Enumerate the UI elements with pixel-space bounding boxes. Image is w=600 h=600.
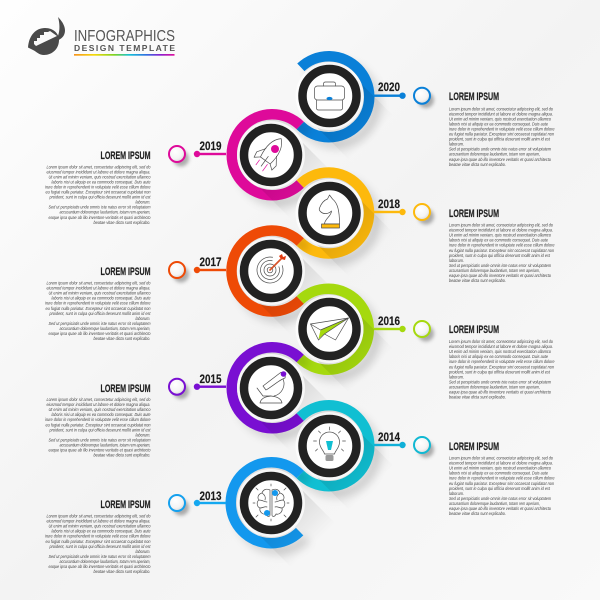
year 2020: 2020 (378, 82, 400, 94)
body 2015: accusantium doloremque laudantium, totam rem aperiam, (60, 442, 150, 448)
body 2020: beatae vitae dicta sunt explicabo. (449, 162, 506, 168)
body 2014: irure dolor in reprehenderit in voluptate velit esse cillum dolore (449, 476, 555, 482)
icon: microscope (257, 371, 286, 403)
body 2013: proident, sunt in culpa qui officia deserunt mollit anim id est (49, 544, 151, 550)
connector 2017 (194, 267, 226, 273)
node 2015 (169, 379, 189, 399)
stage 2020 (296, 56, 434, 168)
text block: 2018 (448, 208, 555, 284)
body 2016: laborum. (449, 374, 464, 380)
body 2013: laborum. (136, 549, 150, 555)
body 2019 (45, 164, 151, 226)
icon: briefcase (314, 82, 344, 110)
node 2017 (169, 262, 189, 282)
body 2017: laborum. (136, 316, 150, 322)
node 2020 (414, 88, 434, 108)
body 2014: accusantium doloremque laudantium, totam rem aperiam, (449, 501, 540, 507)
body 2019: laborum. (136, 200, 150, 206)
connector 2020 (374, 92, 406, 99)
heading 2013: LOREM IPSUM (100, 499, 150, 511)
heading 2017: LOREM IPSUM (100, 266, 150, 278)
body 2019: accusantium doloremque laudantium, totam rem aperiam, (60, 210, 150, 216)
icon: rocket (250, 132, 291, 176)
body 2020: Lorem ipsum dolor sit amet, consectetur adipiscing elit, sed do (449, 106, 553, 112)
body 2016: proident, sunt in culpa qui officia deserunt mollit anim id est (448, 369, 551, 375)
body 2017: eiusmod tempor incididunt ut labore et dolore magna aliqua. (46, 286, 150, 292)
arc 2017 (231, 230, 300, 311)
body 2018: eiusmod tempor incididunt ut labore et dolore magna aliqua. (449, 228, 553, 234)
body 2014: Ut enim ad minim veniam, quis nostrud exercitation ullamco (449, 466, 551, 472)
body 2014: laborum. (449, 491, 464, 497)
body 2019: Lorem ipsum dolor sit amet, consectetur adipiscing elit, sed do (46, 164, 151, 170)
body 2019: beatae vitae dicta sunt explicabo. (94, 220, 150, 226)
body 2014: eaque ipsa quae ab illo inventore veritatis et quasi architecto (449, 506, 551, 512)
connector 2013 (194, 500, 226, 506)
body 2019: eaque ipsa quae ab illo inventore veritatis et quasi architecto (48, 215, 151, 221)
body 2018: beatae vitae dicta sunt explicabo. (449, 278, 506, 284)
year 2018: 2018 (378, 199, 401, 211)
body 2015: Ut enim ad minim veniam, quis nostrud exercitation ullamco (48, 407, 151, 413)
node 2016 (414, 321, 434, 342)
icon: chess knight (319, 195, 340, 228)
body 2016: eiusmod tempor incididunt ut labore et dolore magna aliqua. (449, 344, 553, 350)
heading 2019: LOREM IPSUM (100, 150, 150, 162)
body 2018: proident, sunt in culpa qui officia deserunt mollit anim id est (448, 253, 551, 259)
stage 2015 (169, 347, 343, 460)
body 2020: laborum. (449, 142, 464, 148)
body 2013: eiusmod tempor incididunt ut labore et dolore magna aliqua. (46, 519, 150, 525)
body 2019: eiusmod tempor incididunt ut labore et dolore magna aliqua. (46, 169, 150, 175)
body 2018: laborum. (449, 258, 464, 264)
body 2013 (45, 514, 151, 575)
heading 2014: LOREM IPSUM (449, 441, 499, 453)
body 2014: proident, sunt in culpa qui officia deserunt mollit anim id est (448, 486, 551, 492)
body 2018: laboris nisi ut aliquip ex ea commodo consequat. Duis aute (449, 238, 548, 244)
body 2013: laboris nisi ut aliquip ex ea commodo consequat. Duis aute (52, 529, 151, 535)
medallion 2014 (302, 419, 356, 473)
body 2017: beatae vitae dicta sunt explicabo. (94, 336, 150, 342)
body 2016: irure dolor in reprehenderit in voluptate velit esse cillum dolore (449, 359, 555, 365)
body 2016: Ut enim ad minim veniam, quis nostrud exercitation ullamco (449, 349, 551, 355)
heading 2016: LOREM IPSUM (449, 324, 499, 336)
body 2019: proident, sunt in culpa qui officia deserunt mollit anim id est (49, 195, 151, 201)
medallion 2013 (244, 476, 298, 530)
body 2016 (448, 339, 555, 401)
body 2017 (45, 280, 151, 342)
body 2015: Lorem ipsum dolor sit amet, consectetur adipiscing elit, sed do (46, 397, 151, 403)
connector 2014 (374, 442, 406, 448)
body 2020 (448, 106, 555, 168)
body 2018: accusantium doloremque laudantium, totam rem aperiam, (449, 268, 540, 274)
medallion 2018 (302, 186, 356, 240)
body 2016: accusantium doloremque laudantium, totam rem aperiam, (449, 384, 540, 390)
logo (28, 17, 175, 56)
body 2015: laborum. (136, 432, 150, 438)
body 2020: Sed ut perspiciatis unde omnis iste natus error sit voluptatem (449, 147, 551, 153)
medallion 2017 (244, 244, 298, 298)
body 2016: Lorem ipsum dolor sit amet, consectetur adipiscing elit, sed do (449, 339, 553, 345)
arc 2016 (300, 289, 369, 370)
medallion 2016 (302, 302, 356, 356)
stage 2013 (169, 462, 343, 575)
logo mark (28, 17, 65, 55)
body 2015 (45, 397, 151, 459)
year 2013: 2013 (200, 491, 222, 503)
connector 2019 (194, 151, 226, 157)
text block: 2013 (45, 499, 151, 575)
year 2017: 2017 (200, 257, 222, 269)
body 2015: eiusmod tempor incididunt ut labore et dolore magna aliqua. (46, 402, 150, 408)
icon: paper plane (310, 318, 348, 340)
stage 2019 (169, 114, 343, 227)
body 2017: Ut enim ad minim veniam, quis nostrud exercitation ullamco (48, 291, 151, 297)
body 2018: eaque ipsa quae ab illo inventore veritatis et quasi architecto (449, 273, 551, 279)
body 2014 (448, 456, 555, 517)
arc 2019 (232, 114, 300, 195)
body 2015: beatae vitae dicta sunt explicabo. (94, 453, 150, 459)
body 2017: eaque ipsa quae ab illo inventore veritatis et quasi architecto (48, 331, 151, 337)
body 2020: eu fugiat nulla pariatur. Excepteur sint occaecat cupidatat non (449, 132, 554, 138)
icon: target and dart (253, 253, 287, 287)
body 2014: Lorem ipsum dolor sit amet, consectetur adipiscing elit, sed do (449, 456, 553, 462)
body 2017: Lorem ipsum dolor sit amet, consectetur adipiscing elit, sed do (46, 280, 151, 286)
year 2016: 2016 (378, 316, 400, 328)
body 2019: Sed ut perspiciatis unde omnis iste natus error sit voluptatem (48, 205, 150, 211)
connector 2015 (194, 384, 226, 390)
text block: 2016 (448, 324, 555, 401)
body 2018: Ut enim ad minim veniam, quis nostrud exercitation ullamco (449, 233, 551, 239)
node 2018 (414, 204, 434, 224)
body 2013: beatae vitae dicta sunt explicabo. (94, 569, 150, 575)
body 2019: laboris nisi ut aliquip ex ea commodo consequat. Duis aute (52, 179, 151, 185)
stage 2018 (296, 172, 434, 285)
body 2019: Ut enim ad minim veniam, quis nostrud exercitation ullamco (48, 174, 151, 180)
body 2020: Ut enim ad minim veniam, quis nostrud exercitation ullamco (449, 116, 551, 122)
body 2020: proident, sunt in culpa qui officia deserunt mollit anim id est (448, 137, 551, 143)
body 2015: proident, sunt in culpa qui officia deserunt mollit anim id est (49, 427, 151, 433)
body 2014: eu fugiat nulla pariatur. Excepteur sint occaecat cupidatat non (449, 481, 554, 487)
body 2018 (448, 222, 555, 284)
body 2014: Sed ut perspiciatis unde omnis iste natus error sit voluptatem (449, 496, 551, 502)
heading 2018: LOREM IPSUM (449, 208, 499, 220)
body 2015: irure dolor in reprehenderit in voluptate velit esse cillum dolore (45, 417, 151, 423)
body 2017: irure dolor in reprehenderit in voluptate velit esse cillum dolore (45, 301, 151, 307)
connector 2018 (374, 209, 406, 215)
body 2015: Sed ut perspiciatis unde omnis iste natus error sit voluptatem (48, 437, 150, 443)
body 2014: beatae vitae dicta sunt explicabo. (449, 511, 506, 517)
body 2018: eu fugiat nulla pariatur. Excepteur sint occaecat cupidatat non (449, 248, 554, 254)
body 2013: eaque ipsa quae ab illo inventore veritatis et quasi architecto (48, 564, 151, 570)
body 2014: laboris nisi ut aliquip ex ea commodo consequat. Duis aute (449, 471, 548, 477)
arc 2018 (300, 172, 369, 254)
text block: 2017 (45, 266, 151, 342)
body 2015: eaque ipsa quae ab illo inventore veritatis et quasi architecto (48, 448, 151, 454)
body 2016: eu fugiat nulla pariatur. Excepteur sint occaecat cupidatat non (449, 364, 554, 370)
year 2014: 2014 (378, 432, 401, 444)
text block: 2014 (448, 441, 555, 517)
heading 2015: LOREM IPSUM (100, 383, 150, 395)
body 2013: Sed ut perspiciatis unde omnis iste natus error sit voluptatem (48, 554, 150, 560)
medallion 2019 (244, 128, 298, 182)
body 2016: beatae vitae dicta sunt explicabo. (449, 395, 506, 401)
body 2014: eiusmod tempor incididunt ut labore et dolore magna aliqua. (449, 461, 553, 467)
body 2017: proident, sunt in culpa qui officia deserunt mollit anim id est (49, 311, 151, 317)
arc 2013 (231, 462, 300, 543)
body 2019: eu fugiat nulla pariatur. Excepteur sint occaecat cupidatat non (46, 190, 151, 196)
stage 2014 (296, 405, 434, 518)
body 2013: accusantium doloremque laudantium, totam rem aperiam, (60, 559, 150, 565)
body 2020: eiusmod tempor incididunt ut labore et dolore magna aliqua. (449, 111, 553, 117)
body 2013: irure dolor in reprehenderit in voluptate velit esse cillum dolore (45, 534, 151, 540)
node 2013 (169, 495, 189, 516)
body 2018: Lorem ipsum dolor sit amet, consectetur adipiscing elit, sed do (449, 222, 553, 228)
body 2020: eaque ipsa quae ab illo inventore veritatis et quasi architecto (449, 157, 551, 163)
medallion 2020 (302, 69, 356, 123)
body 2017: accusantium doloremque laudantium, totam rem aperiam, (60, 326, 150, 332)
logo title: INFOGRAPHICS (74, 28, 175, 45)
heading 2020: LOREM IPSUM (449, 91, 499, 103)
arc 2020 (300, 56, 369, 137)
body 2015: laboris nisi ut aliquip ex ea commodo consequat. Duis aute (52, 412, 151, 418)
arc 2014 (300, 405, 369, 486)
body 2015: eu fugiat nulla pariatur. Excepteur sint occaecat cupidatat non (46, 422, 151, 428)
body 2013: Ut enim ad minim veniam, quis nostrud exercitation ullamco (48, 524, 151, 530)
medallion 2015 (244, 361, 298, 415)
text block: 2020 (448, 91, 555, 168)
body 2018: irure dolor in reprehenderit in voluptate velit esse cillum dolore (449, 243, 555, 249)
body 2013: eu fugiat nulla pariatur. Excepteur sint occaecat cupidatat non (46, 539, 151, 545)
body 2013: Lorem ipsum dolor sit amet, consectetur adipiscing elit, sed do (46, 514, 151, 520)
node 2019 (169, 146, 189, 166)
body 2017: laboris nisi ut aliquip ex ea commodo consequat. Duis aute (52, 296, 151, 302)
body 2019: irure dolor in reprehenderit in voluptate velit esse cillum dolore (45, 185, 151, 191)
text block: 2015 (45, 383, 151, 459)
stage 2016 (296, 289, 434, 401)
body 2017: eu fugiat nulla pariatur. Excepteur sint occaecat cupidatat non (46, 306, 151, 312)
connector 2016 (374, 326, 406, 332)
body 2018: Sed ut perspiciatis unde omnis iste natus error sit voluptatem (449, 263, 551, 269)
year 2019: 2019 (200, 141, 222, 153)
arc 2015 (232, 347, 300, 428)
icon: light bulb (314, 427, 346, 461)
node 2014 (414, 437, 434, 458)
year 2015: 2015 (200, 374, 222, 386)
body 2016: Sed ut perspiciatis unde omnis iste natus error sit voluptatem (449, 379, 551, 385)
body 2017: Sed ut perspiciatis unde omnis iste natus error sit voluptatem (48, 321, 150, 327)
body 2020: accusantium doloremque laudantium, totam rem aperiam, (449, 152, 540, 158)
rainbow rule (74, 54, 174, 56)
body 2020: irure dolor in reprehenderit in voluptate velit esse cillum dolore (449, 127, 555, 133)
body 2016: laboris nisi ut aliquip ex ea commodo consequat. Duis aute (449, 354, 548, 360)
text block: 2019 (45, 150, 151, 226)
body 2020: laboris nisi ut aliquip ex ea commodo consequat. Duis aute (449, 121, 548, 127)
icon: brain (253, 484, 289, 521)
stage 2017 (169, 230, 343, 343)
logo subtitle: DESIGN TEMPLATE (74, 43, 175, 53)
body 2016: eaque ipsa quae ab illo inventore veritatis et quasi architecto (449, 390, 551, 396)
